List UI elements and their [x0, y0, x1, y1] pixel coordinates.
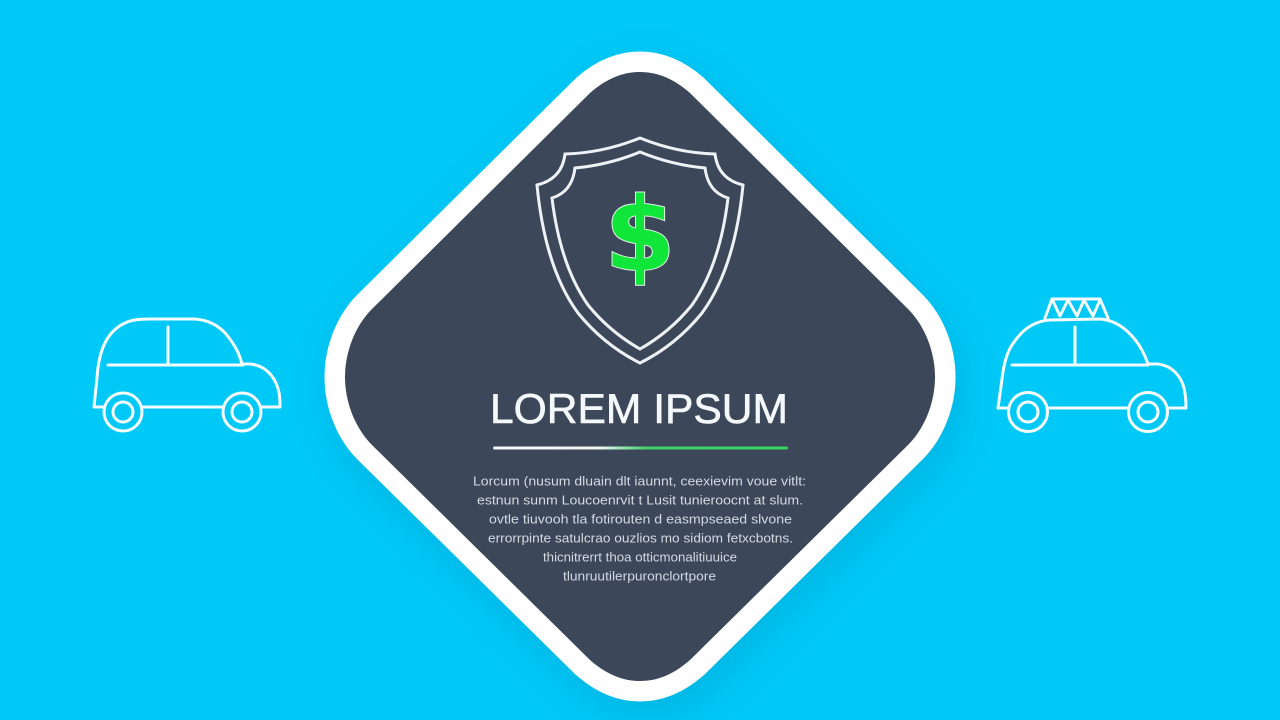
taxi rear wheel	[1008, 392, 1048, 432]
icon: taxi	[998, 299, 1186, 432]
body text: Lorcum (nusum dluain dlt iaunnt, ceexievim voue vitlt:	[473, 474, 806, 488]
taxi roof sign	[1045, 299, 1108, 318]
dollar sign: $	[605, 176, 675, 295]
title underline	[493, 446, 788, 450]
body text: errorrpinte satulcrao ouzlios mo sidiom fetxcbotns.	[488, 532, 793, 546]
taxi front wheel	[1128, 392, 1168, 432]
title: LOREM IPSUM	[490, 385, 788, 432]
body text: estnun sunm Loucoenrvit t Lusit tunieroocnt at slum.	[477, 494, 803, 508]
car rear wheel	[104, 393, 142, 431]
taxi body	[998, 319, 1186, 408]
body text: tlunruutilerpuronclortpore	[563, 570, 716, 584]
panel: central diamond	[345, 72, 935, 681]
car front wheel	[223, 393, 261, 431]
diamond dark fill	[345, 72, 935, 681]
icon: shield with dollar	[537, 138, 743, 363]
icon: car	[94, 319, 280, 431]
shield inner outline	[552, 152, 728, 349]
body text	[473, 474, 806, 584]
car window lines	[108, 327, 243, 365]
car body	[94, 319, 280, 407]
shield outer outline	[537, 138, 743, 363]
taxi window lines	[1012, 327, 1148, 365]
body text: ovtle tiuvooh tla fotirouten d easmpseaed slvone	[489, 512, 792, 526]
diamond white border	[345, 72, 935, 681]
body text: thicnitrerrt thoa otticmonalitiuuice	[543, 550, 737, 564]
